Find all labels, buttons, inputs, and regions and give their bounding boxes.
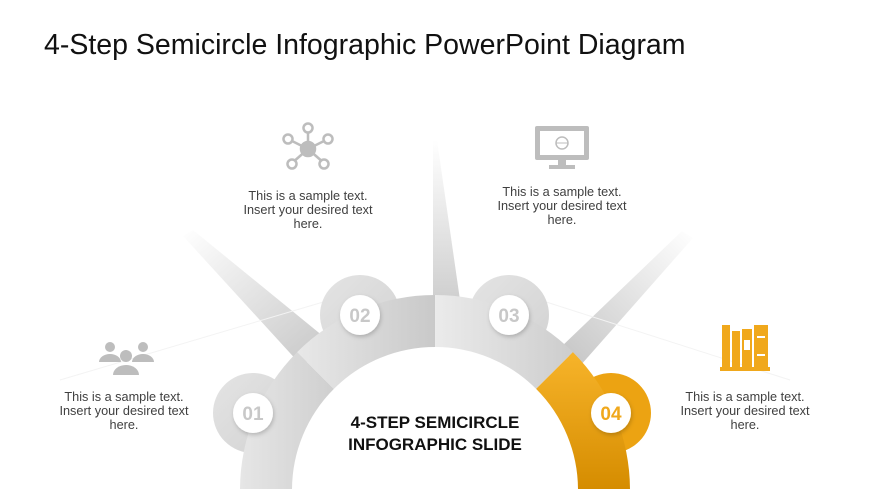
text 02: Insert your desired text	[243, 203, 373, 217]
text 01: Insert your desired text	[59, 404, 189, 418]
rays	[60, 140, 790, 380]
text 01: This is a sample text.	[64, 390, 184, 404]
text 01	[59, 390, 189, 432]
text 04: here.	[731, 418, 759, 432]
segment 03	[435, 275, 573, 389]
text 03: Insert your desired text	[497, 199, 627, 213]
text 04: This is a sample text.	[685, 390, 805, 404]
icon: monitor	[535, 126, 589, 169]
center text	[348, 413, 522, 454]
segment 02	[297, 275, 435, 389]
center text: 4-STEP SEMICIRCLE	[351, 413, 519, 432]
center text: INFOGRAPHIC SLIDE	[348, 435, 522, 454]
text 04	[680, 390, 810, 432]
icon: network	[284, 124, 332, 168]
text 03	[497, 185, 627, 227]
segment 04: 04	[600, 404, 622, 425]
title: 4-Step Semicircle Infographic PowerPoint Diagram	[44, 29, 686, 61]
icon: people	[99, 342, 154, 375]
segment 02: 02	[349, 306, 371, 327]
segment 01	[213, 352, 334, 489]
segment 04	[536, 352, 651, 489]
text 02	[243, 189, 373, 231]
segment 03: 03	[498, 306, 520, 327]
text 04: Insert your desired text	[680, 404, 810, 418]
text 02: here.	[294, 217, 322, 231]
text 03: This is a sample text.	[502, 185, 622, 199]
text 02: This is a sample text.	[248, 189, 368, 203]
icon: books	[720, 325, 770, 371]
segment 01: 01	[242, 404, 264, 425]
text 01: here.	[110, 418, 138, 432]
text 03: here.	[548, 213, 576, 227]
